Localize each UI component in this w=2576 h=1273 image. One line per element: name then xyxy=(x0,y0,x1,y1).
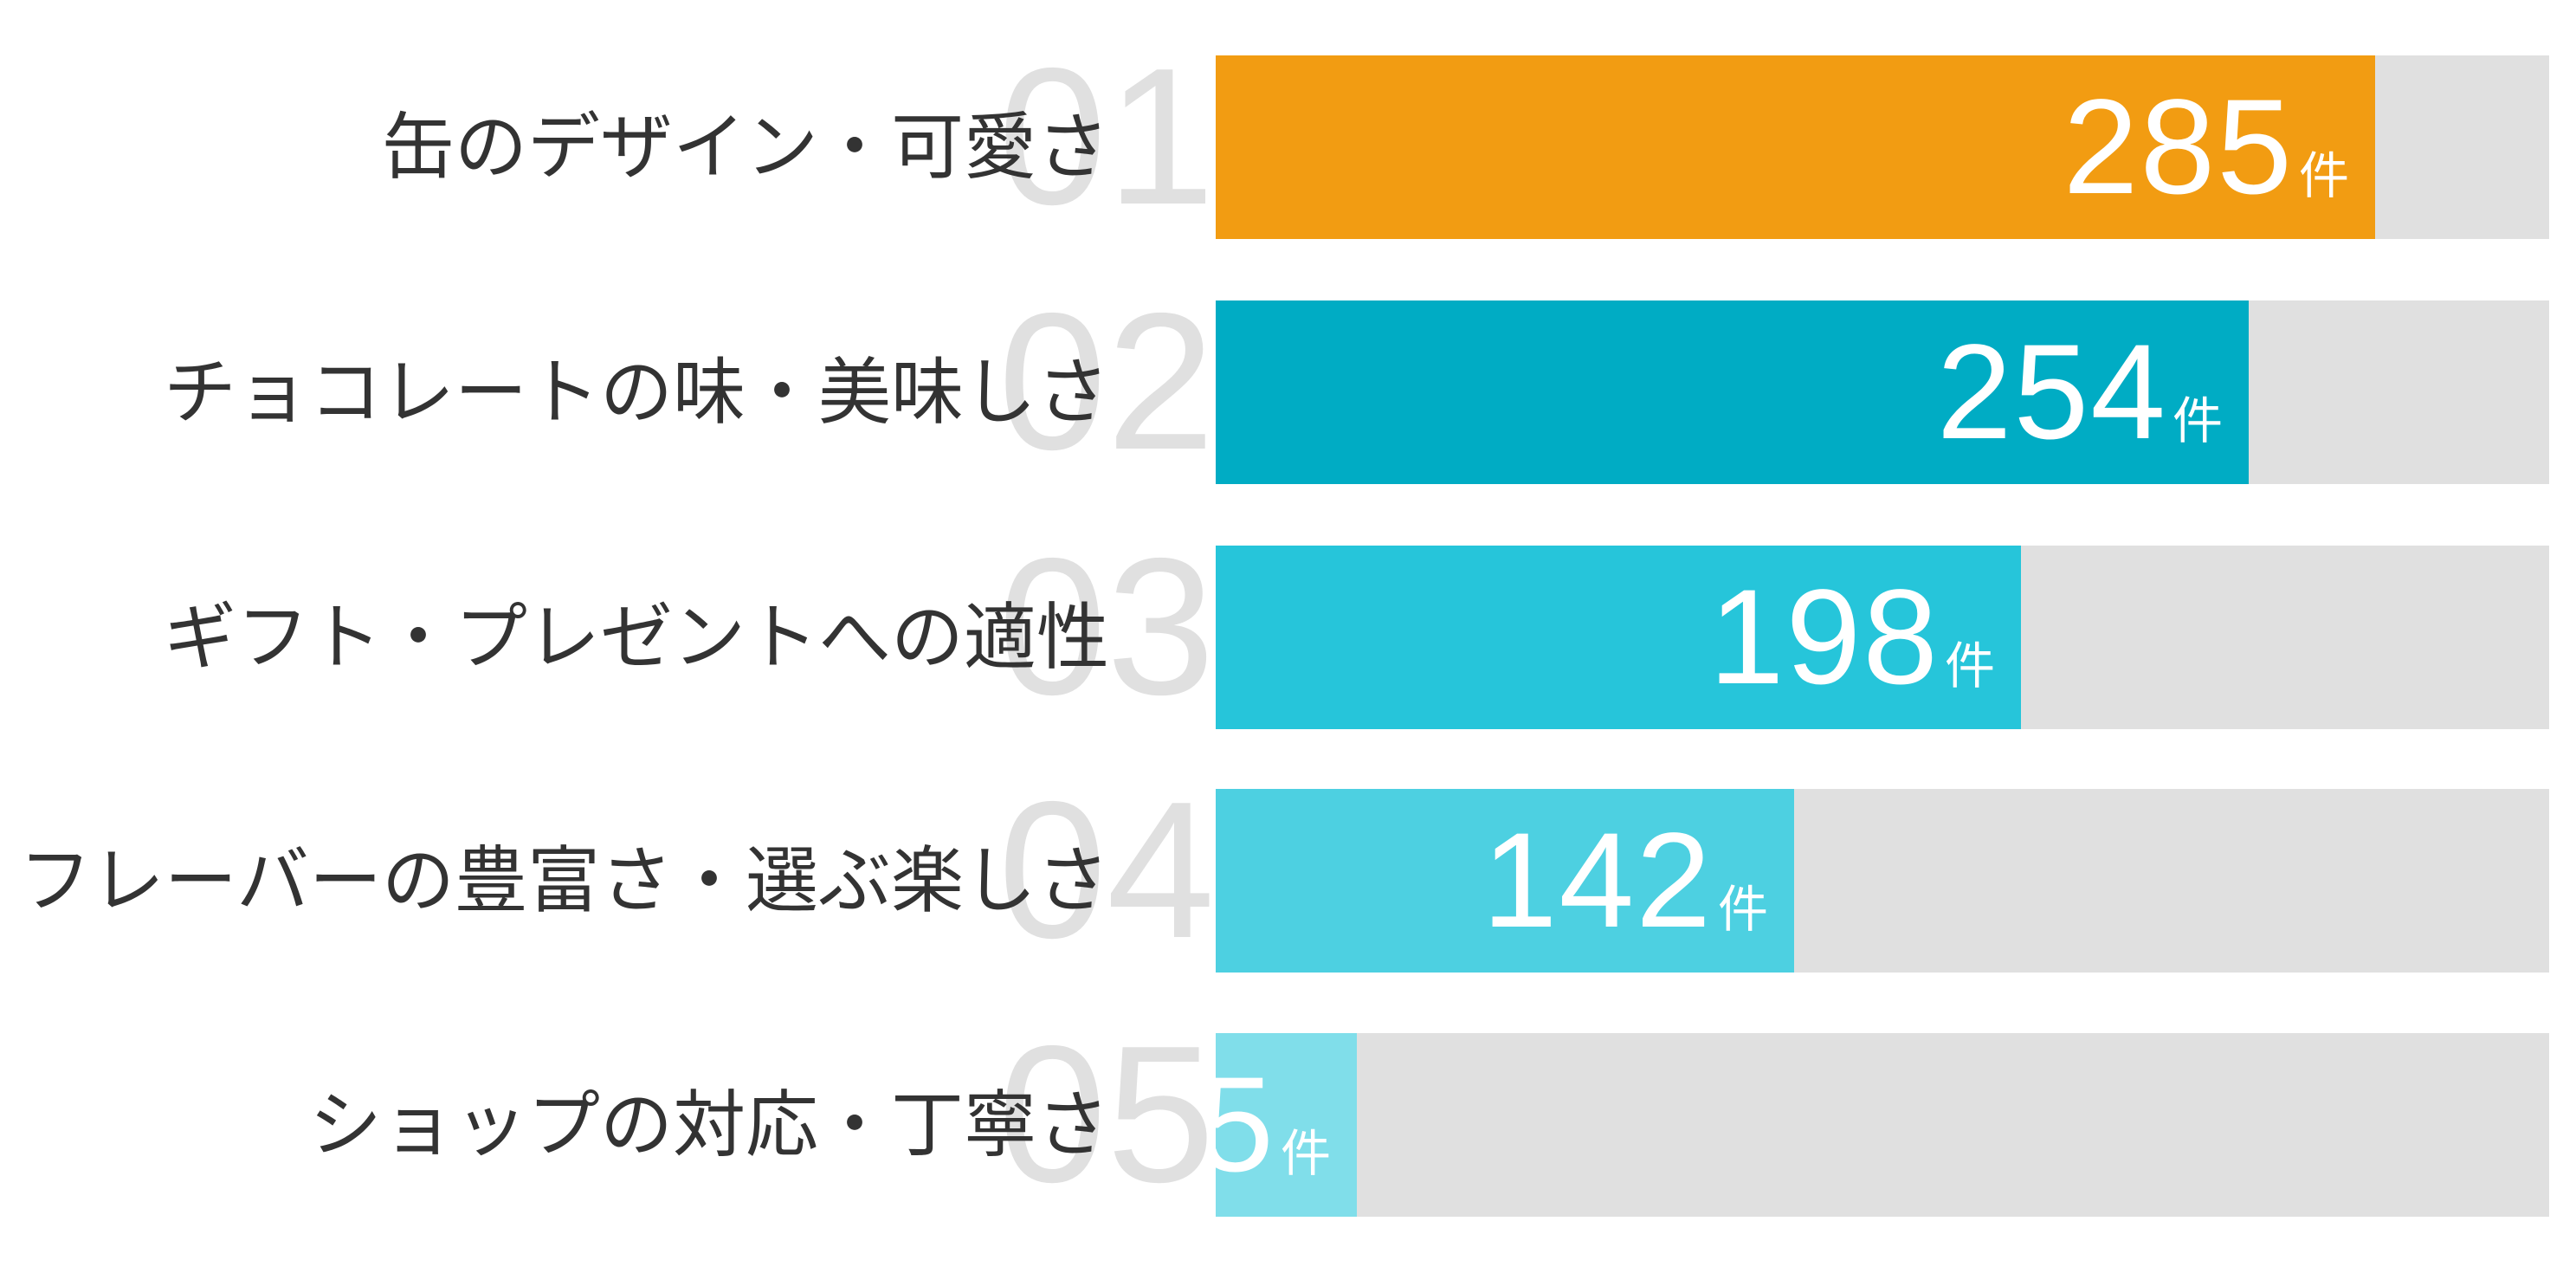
bar 254: 254件 xyxy=(1937,317,2223,468)
bar 285 xyxy=(1216,55,2375,239)
row 1 xyxy=(382,27,2549,245)
rank number 01: 01 xyxy=(998,27,1215,245)
bar 35 xyxy=(1216,1033,1357,1217)
label: ギフト・プレゼントへの適性 xyxy=(164,597,1109,678)
bar 142 xyxy=(1216,789,1794,973)
row 3 xyxy=(164,517,2549,735)
label: チョコレートの味・美味しさ xyxy=(164,352,1109,433)
rank number 03: 03 xyxy=(998,517,1215,735)
label: ショップの対応・丁寧さ xyxy=(309,1084,1109,1166)
row 4 xyxy=(19,760,2549,979)
rank number 02: 02 xyxy=(998,272,1215,490)
row 5 xyxy=(309,1005,2549,1223)
bar 198: 198件 xyxy=(1709,562,1995,713)
rank number 04: 04 xyxy=(998,760,1215,979)
bar 142: 142件 xyxy=(1482,805,1768,956)
bar track xyxy=(1216,1033,2549,1217)
bar 254 xyxy=(1216,300,2249,484)
bar track xyxy=(1216,789,2549,973)
bar track xyxy=(1216,55,2549,239)
bar 285: 285件 xyxy=(2063,72,2349,223)
bar track xyxy=(1216,300,2549,484)
bar track xyxy=(1216,546,2549,729)
label: フレーバーの豊富さ・選ぶ楽しさ xyxy=(19,840,1109,921)
row 2 xyxy=(164,272,2549,490)
rank number 05: 05 xyxy=(998,1005,1215,1223)
bar 198 xyxy=(1216,546,2021,729)
label: 缶のデザイン・可愛さ xyxy=(382,107,1109,188)
